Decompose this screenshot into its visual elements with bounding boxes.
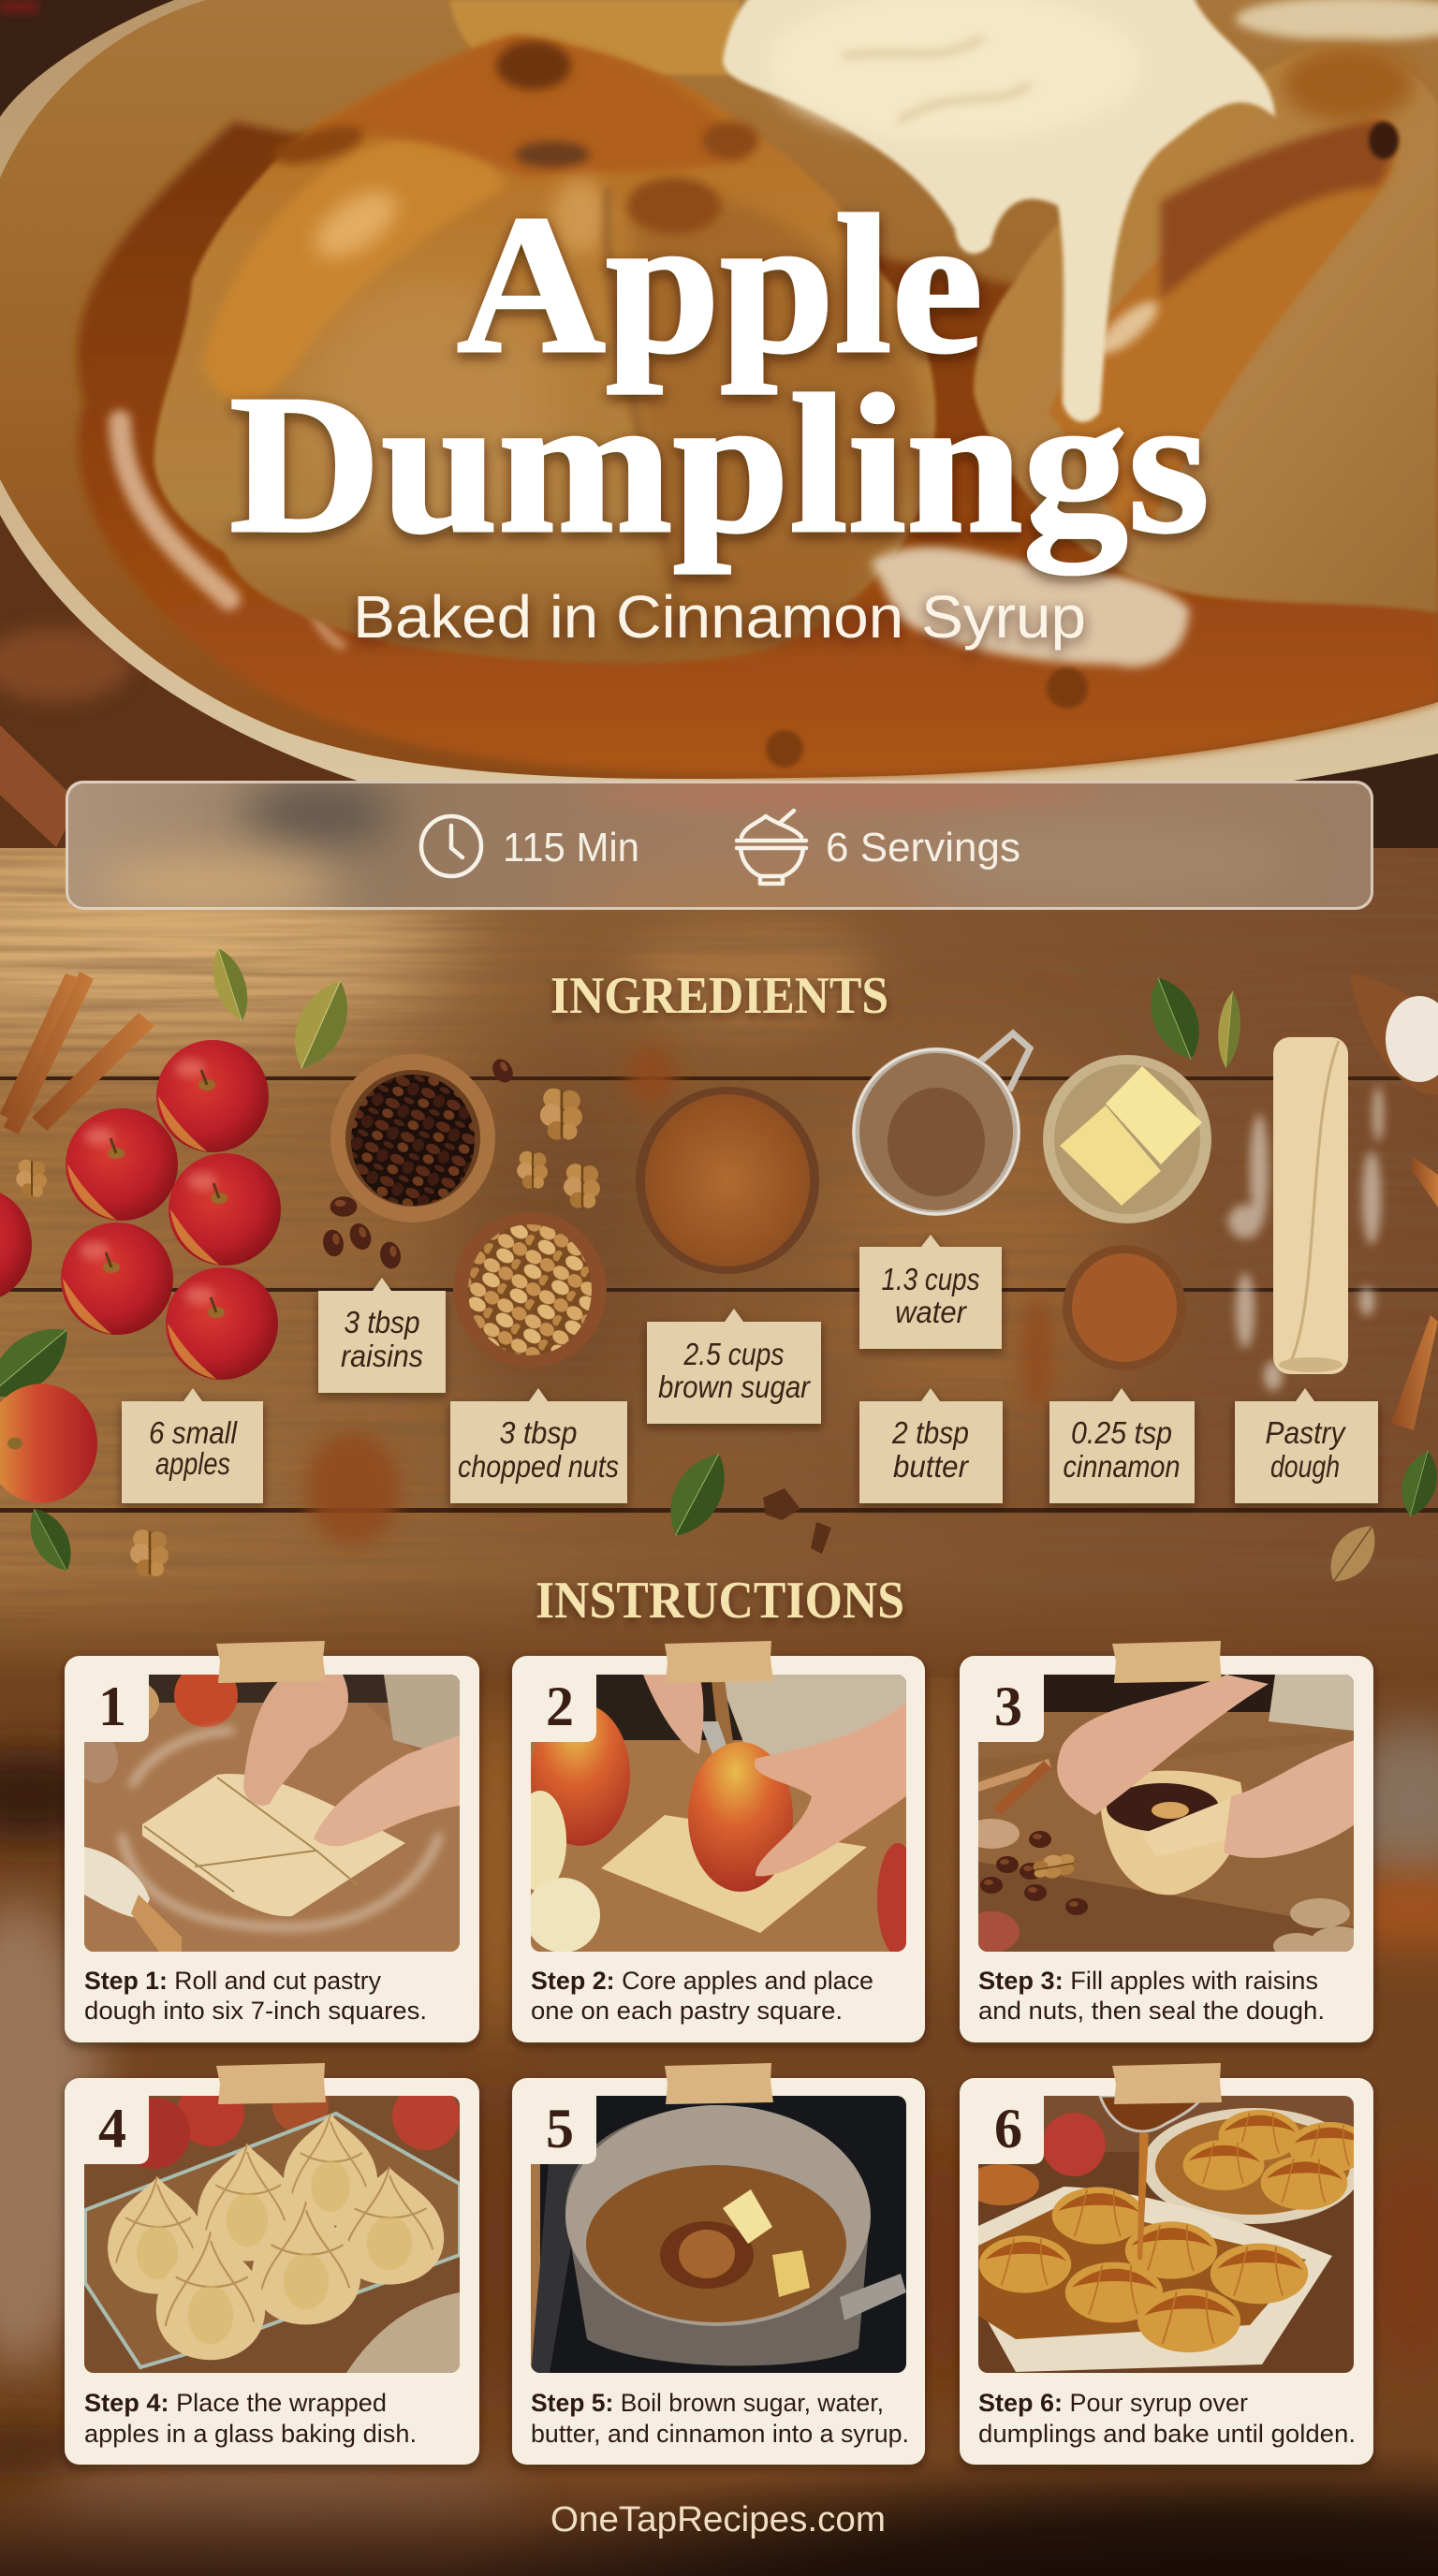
- number tab: 2: [546, 1676, 574, 1737]
- plate inner wall: [0, 0, 1438, 779]
- tag: chopped nuts: chopped nuts: [458, 1449, 619, 1484]
- step text: Step 3: Fill apples with raisins: [978, 1967, 1318, 1995]
- step text: [84, 1967, 427, 2025]
- step text: Step 1: Roll and cut pastry: [84, 1967, 381, 1995]
- syrup bubbles: [766, 667, 1088, 768]
- icon: bowl: [737, 811, 806, 884]
- step text: [531, 1967, 873, 2025]
- raisins: [321, 1056, 517, 1270]
- tape: [1112, 1641, 1222, 1683]
- time and servings bar: [66, 781, 1373, 917]
- heading: instructions: INSTRUCTIONS: [536, 1572, 904, 1630]
- step text: dumplings and bake until golden.: [978, 2420, 1356, 2448]
- step text: one on each pastry square.: [531, 1997, 843, 2025]
- hero photo: dumplings in a plate: [0, 0, 1438, 848]
- chopped nuts bowl: [453, 1212, 607, 1368]
- step text: [978, 2389, 1356, 2448]
- step text: Step 4: Place the wrapped: [84, 2389, 387, 2417]
- heading: ingredients: INGREDIENTS: [550, 967, 888, 1025]
- cook time: 115 Min: [503, 825, 639, 871]
- step card 4: [65, 2063, 479, 2465]
- tag: apples: 6 small: [149, 1415, 238, 1450]
- step text: butter, and cinnamon into a syrup.: [531, 2420, 909, 2448]
- number tab: [978, 2093, 1044, 2164]
- tag: pastry dough: [1235, 1388, 1378, 1503]
- step text: [531, 2389, 909, 2448]
- cinnamon chunks: [763, 1488, 831, 1554]
- step text: dough into six 7-inch squares.: [84, 1997, 427, 2025]
- ingredient tags: [122, 1235, 1378, 1503]
- tag: pastry dough: dough: [1270, 1449, 1340, 1484]
- number tab: 4: [98, 2098, 126, 2159]
- footer website: OneTapRecipes.com: [550, 2500, 886, 2539]
- step card 1: [65, 1641, 479, 2042]
- apples: [0, 1040, 281, 1503]
- measuring cup of water: [852, 1033, 1030, 1216]
- step card 3: [960, 1641, 1373, 2042]
- left dumpling: [154, 36, 935, 664]
- tag: cinnamon: [1049, 1388, 1195, 1503]
- photo: rolling and cutting dough: [66, 1663, 460, 1952]
- photo: wrapped apples in glass dish: [84, 2077, 460, 2374]
- tag: cinnamon: 0.25 tsp: [1071, 1415, 1172, 1450]
- tag: chopped nuts: [450, 1388, 627, 1503]
- tag: apples: apples: [155, 1446, 230, 1481]
- icon: clock: [421, 816, 481, 876]
- tag: raisins: raisins: [341, 1339, 423, 1373]
- tape: [216, 1641, 326, 1683]
- melted cream patch: [871, 547, 1189, 666]
- ingredients scene: [0, 944, 1438, 1591]
- title: Apple: [457, 174, 983, 394]
- tag: water: 1.3 cups: [882, 1262, 979, 1296]
- cinnamon powder piles: [306, 1045, 1052, 1544]
- back dumpling: [449, 0, 740, 75]
- number tab: 1: [98, 1676, 126, 1737]
- tag: brown sugar: brown sugar: [658, 1369, 812, 1404]
- photo: filling dough: [963, 1675, 1367, 1959]
- tag: water: water: [895, 1295, 968, 1329]
- number tab: [978, 1671, 1044, 1742]
- step text: [84, 2389, 417, 2448]
- subtitle: Baked in Cinnamon Syrup: [353, 583, 1086, 651]
- walnuts: [16, 1089, 600, 1576]
- right dumpling: [974, 0, 1438, 613]
- wooden table top: [0, 0, 1438, 848]
- number tab: 6: [994, 2098, 1022, 2159]
- flour dust: [1228, 1086, 1384, 1391]
- step text: Step 2: Core apples and place: [531, 1967, 873, 1995]
- tag: apples: [122, 1388, 263, 1503]
- small cinnamon bowl: [1063, 1245, 1186, 1370]
- title: [229, 174, 1210, 575]
- tape: [216, 2063, 326, 2104]
- tag: raisins: [318, 1278, 446, 1393]
- number tab: [531, 2093, 596, 2164]
- cream swirl in syrup: [120, 421, 342, 646]
- step text: Step 5: Boil brown sugar, water,: [531, 2389, 884, 2417]
- cinnamon stick: [0, 716, 80, 847]
- tag: brown sugar: [647, 1309, 821, 1424]
- plate rim: [0, 0, 1438, 819]
- step card 5: [512, 2063, 925, 2465]
- ice cream scoop: [723, 0, 1275, 422]
- tag: raisins: 3 tbsp: [345, 1305, 419, 1339]
- step text: and nuts, then seal the dough.: [978, 1997, 1325, 2025]
- tag: butter: butter: [893, 1449, 970, 1484]
- leaves: [0, 944, 1438, 1591]
- raisins bowl: [330, 1054, 495, 1222]
- step text: apples in a glass baking dish.: [84, 2420, 417, 2448]
- number tab: 3: [994, 1676, 1022, 1737]
- wooden table background: [0, 824, 1438, 1677]
- photo: pouring syrup over dumplings: [964, 2096, 1371, 2374]
- step text: Step 6: Pour syrup over: [978, 2389, 1248, 2417]
- photo: coring apple: [514, 1675, 918, 1955]
- syrup pool: [77, 122, 1438, 777]
- tape: [665, 1641, 773, 1683]
- step text: [978, 1967, 1325, 2025]
- butter plate: [1043, 1055, 1211, 1223]
- number tab: [84, 2093, 149, 2164]
- title: Dumplings: [229, 354, 1210, 575]
- tape: [1112, 2063, 1222, 2104]
- cinnamon sticks: [0, 972, 1438, 1430]
- tag: butter: [859, 1388, 1003, 1503]
- tag: chopped nuts: 3 tbsp: [500, 1415, 577, 1450]
- tag: water: [859, 1235, 1002, 1349]
- wooden spoon with flour: [1350, 973, 1438, 1095]
- tag: brown sugar: 2.5 cups: [683, 1337, 785, 1371]
- step card 6: [960, 2063, 1373, 2465]
- pastry dough roll: [1273, 1037, 1348, 1374]
- photo: syrup boiling in a pot: [531, 2096, 906, 2439]
- number tab: [531, 1671, 596, 1742]
- number tab: 5: [546, 2098, 574, 2159]
- tag: butter: 2 tbsp: [891, 1415, 969, 1450]
- number tab: [84, 1671, 149, 1742]
- brown sugar bowl: [636, 1087, 819, 1274]
- tape: [665, 2063, 773, 2104]
- tag: cinnamon: cinnamon: [1064, 1449, 1180, 1484]
- step card 2: [512, 1641, 925, 2042]
- tag: pastry dough: Pastry: [1266, 1415, 1347, 1450]
- servings: 6 Servings: [826, 825, 1020, 871]
